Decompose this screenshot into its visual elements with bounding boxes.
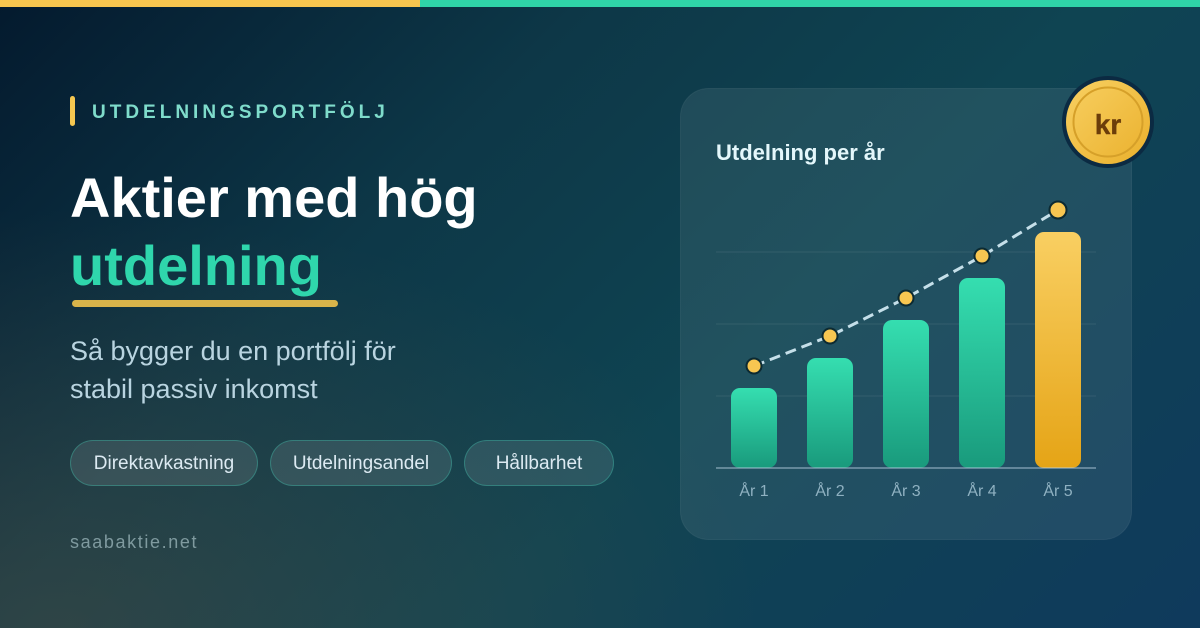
eyebrow text: UTDELNINGSPORTFÖLJ <box>92 102 389 123</box>
axis labels: År 2 <box>815 481 845 500</box>
title line 1: Aktier med hög <box>70 166 478 229</box>
axis labels: År 4 <box>967 481 997 500</box>
axis baseline <box>716 467 1096 469</box>
title <box>70 166 478 307</box>
eyebrow <box>70 96 389 126</box>
bar: År 4 <box>959 278 1005 468</box>
subtitle: stabil passiv inkomst <box>70 374 318 404</box>
eyebrow marker <box>70 96 75 126</box>
bar: År 2 <box>807 358 853 468</box>
tags <box>70 440 614 486</box>
tag: Direktavkastning <box>70 440 258 486</box>
tag: Hållbarhet: Hållbarhet <box>496 453 582 474</box>
trend points <box>746 202 1066 374</box>
bar chart <box>716 232 1096 468</box>
tag: Direktavkastning: Direktavkastning <box>94 453 234 474</box>
trend line <box>754 210 1058 366</box>
icon: kr coin <box>1062 76 1154 168</box>
coin label: kr <box>1095 109 1121 140</box>
axis labels: År 1 <box>739 481 769 500</box>
title underline <box>72 300 338 307</box>
tag: Utdelningsandel <box>270 440 452 486</box>
axis labels <box>739 481 1073 500</box>
bar: År 3 <box>883 320 929 468</box>
subtitle <box>70 336 396 404</box>
axis labels: År 5 <box>1043 481 1073 500</box>
top accent bar <box>0 0 1200 7</box>
chart title: Utdelning per år <box>716 140 885 165</box>
title line 2: utdelning <box>70 234 322 297</box>
source site: saabaktie.net <box>70 532 198 552</box>
accent bar: yellow segment <box>0 0 420 7</box>
axis labels: År 3 <box>891 481 921 500</box>
subtitle: Så bygger du en portfölj för <box>70 336 396 366</box>
bar: År 5 <box>1035 232 1081 468</box>
card background <box>680 88 1132 540</box>
tag: Utdelningsandel: Utdelningsandel <box>293 453 429 474</box>
tag: Hållbarhet <box>464 440 614 486</box>
bar: År 1 <box>731 388 777 468</box>
